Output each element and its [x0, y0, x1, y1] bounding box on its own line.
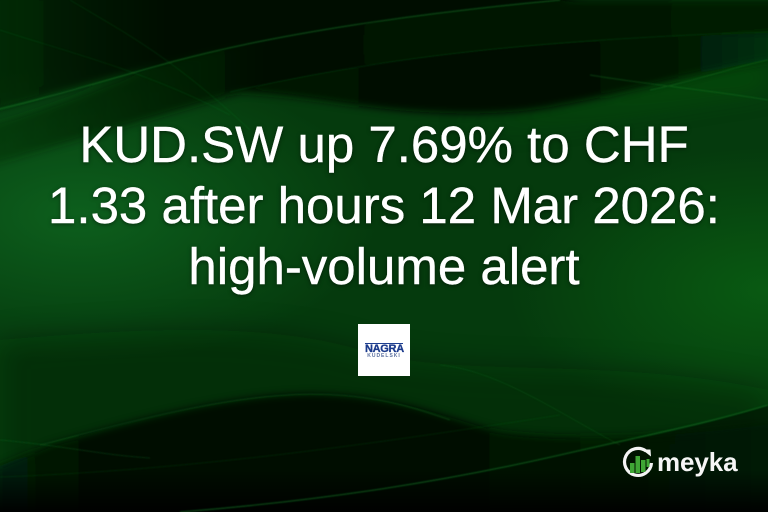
title: high-volume alert: [188, 238, 580, 295]
brand: meyka logo: [622, 446, 738, 477]
bottom dark hill: [0, 394, 768, 512]
title: 1.33 after hours 12 Mar 2026:: [48, 177, 720, 234]
top dark swoosh: [0, 0, 768, 165]
title: KUD.SW up 7.69% to CHF: [79, 116, 689, 173]
icon: meyka chart ring: [622, 446, 654, 477]
logo: Nagra Kudelski: KUDELSKI: [367, 353, 401, 359]
logo: Nagra Kudelski: [358, 324, 410, 376]
logo: Nagra Kudelski: NAGRA: [365, 343, 404, 355]
wordmark: meyka: [657, 447, 737, 477]
title: [48, 116, 720, 297]
